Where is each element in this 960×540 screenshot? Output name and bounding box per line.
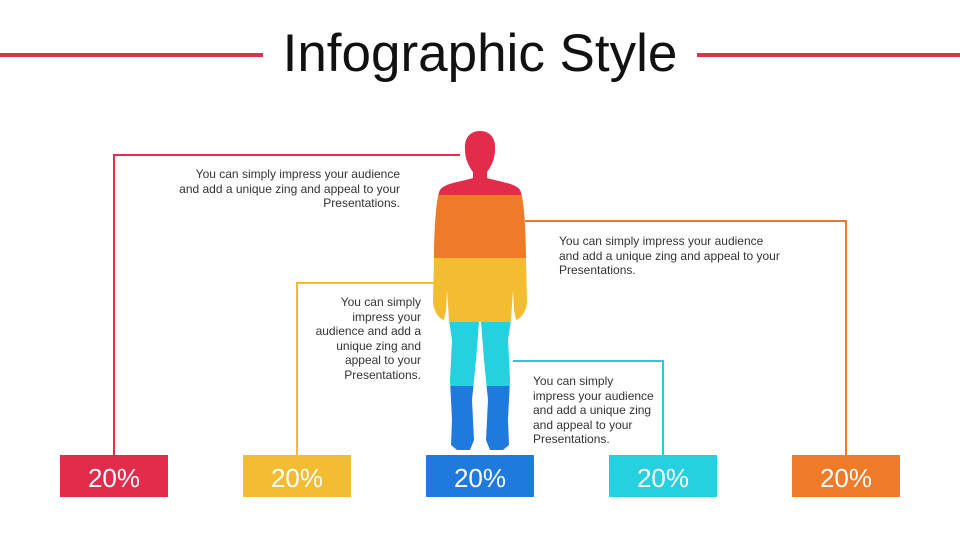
human figure [433, 131, 527, 450]
box orange [792, 455, 900, 497]
title: Infographic Style [283, 24, 677, 83]
text block: orange: You can simply impress your audience and add a unique zing and appeal to your Presentations. [559, 234, 780, 277]
box red [60, 455, 168, 497]
title [0, 24, 960, 83]
text block: cyan: You can simply impress your audience and add a unique zing and appeal to your Presentations. [533, 374, 654, 446]
text block: yellow: You can simply impress your audience and add a unique zing and appeal to your Presentations. [316, 295, 421, 382]
box yellow: 20% [271, 463, 323, 493]
box red: 20% [88, 463, 140, 493]
box cyan [609, 455, 717, 497]
box blue [426, 455, 534, 497]
text block: red: You can simply impress your audience and add a unique zing and appeal to your Presentations. [179, 167, 400, 210]
box orange: 20% [820, 463, 872, 493]
box cyan: 20% [637, 463, 689, 493]
box blue: 20% [454, 463, 506, 493]
box yellow [243, 455, 351, 497]
